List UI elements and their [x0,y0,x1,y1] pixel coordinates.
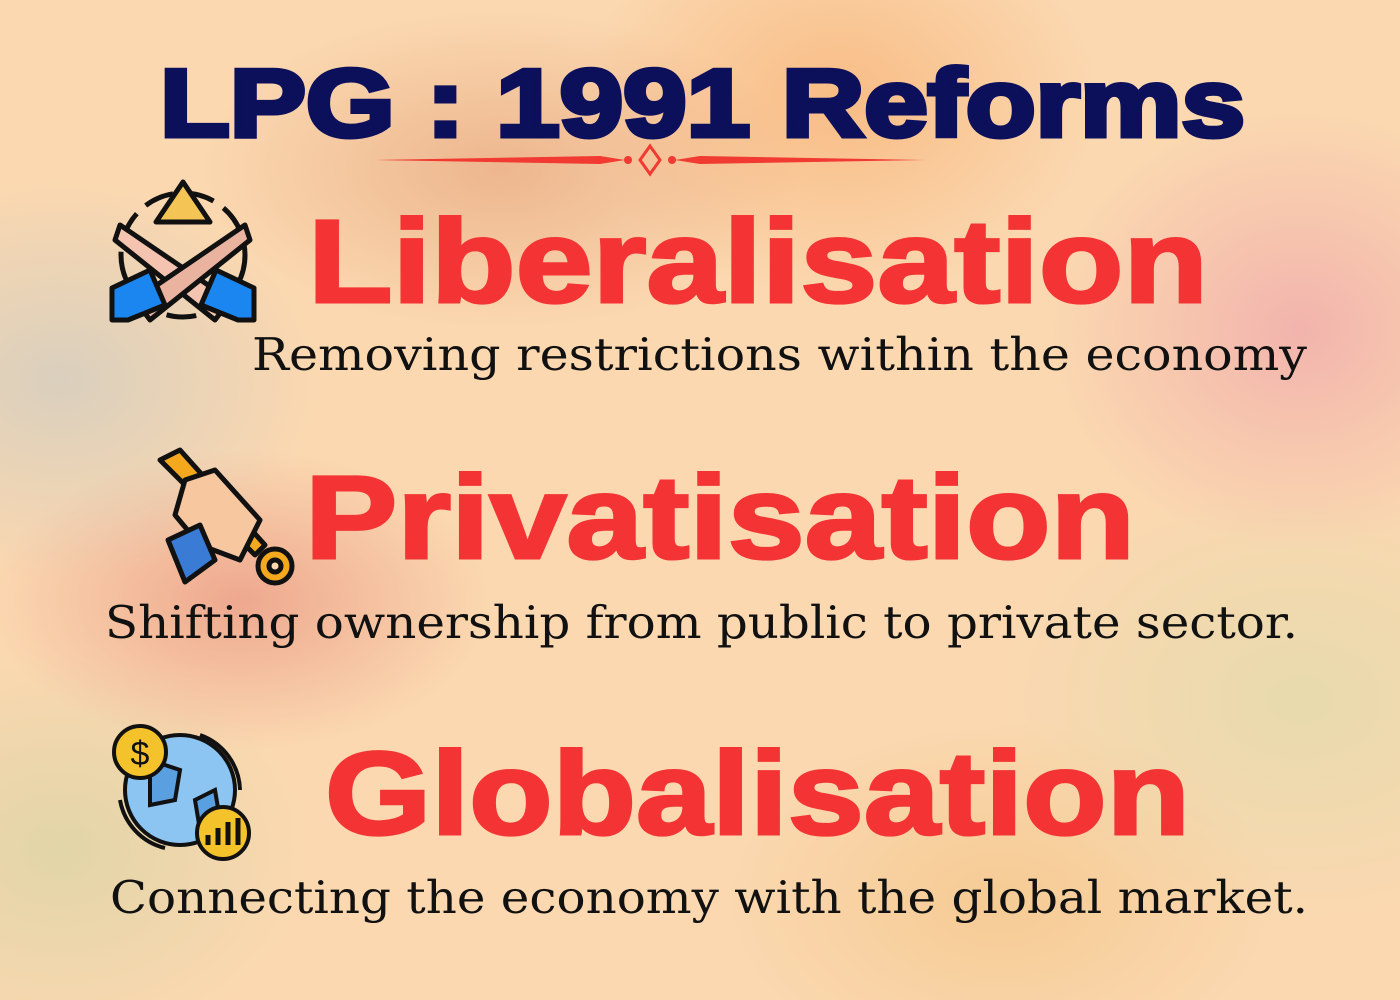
heading: Privatisation: Privatisation [305,452,1135,584]
icon: globe with dollar [114,726,249,859]
icon: globe with dollar: $ [131,735,150,773]
text: globalisation description: Connecting the economy with the global market. [110,871,1308,924]
icon: hand with key [160,450,292,583]
heading: Globalisation: Globalisation [325,728,1190,860]
icon: crossed hands [112,182,254,320]
title ornament [375,146,925,174]
text: liberalisation description: Removing restrictions within the economy [252,328,1308,381]
heading: Liberalisation: Liberalisation [308,196,1208,328]
text: privatisation description: Shifting ownership from public to private sector. [105,596,1298,649]
title: LPG : 1991 Reforms [160,50,1245,157]
